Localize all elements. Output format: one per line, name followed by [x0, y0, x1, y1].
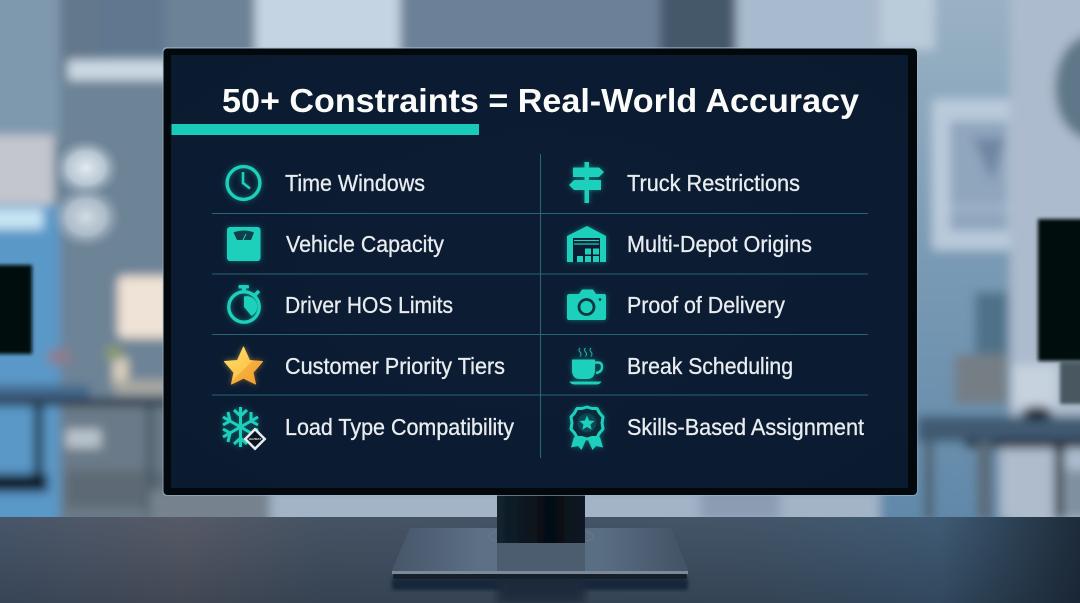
item: Customer Priority Tiers: [224, 347, 505, 384]
table surface: [0, 517, 1080, 603]
icon: camera: [567, 290, 606, 320]
label: Truck Restrictions: Truck Restrictions: [627, 170, 800, 196]
icon: warehouse: [567, 226, 606, 262]
label: Multi-Depot Origins: Multi-Depot Origins: [627, 231, 812, 257]
label: Vehicle Capacity: Vehicle Capacity: [286, 231, 444, 257]
label: Driver HOS Limits: Driver HOS Limits: [285, 292, 453, 318]
item: Break Scheduling: [570, 348, 793, 384]
title: 50+ Constraints = Real-World Accuracy: [222, 82, 860, 119]
label: Customer Priority Tiers: Customer Priority Tiers: [285, 353, 505, 379]
monitor stand: [392, 495, 688, 603]
label: Break Scheduling: Break Scheduling: [627, 353, 793, 379]
icon: coffee cup: [570, 348, 602, 384]
label: Load Type Compatibility: Load Type Compatibility: [285, 414, 514, 440]
icon: clock: [227, 167, 260, 199]
icon: signpost: [569, 162, 604, 203]
monitor screen: [171, 55, 908, 488]
item: Time Windows: [227, 167, 425, 199]
item: Driver HOS Limits: [229, 285, 453, 322]
item: Proof of Delivery: [567, 290, 785, 320]
label: Skills-Based Assignment: Skills-Based Assignment: [627, 414, 865, 440]
item: Multi-Depot Origins: [567, 226, 812, 262]
item: Skills-Based Assignment: [571, 407, 865, 450]
icon: award badge: [571, 407, 603, 450]
item: Truck Restrictions: [569, 162, 800, 203]
title accent bar: [172, 124, 479, 135]
label: Proof of Delivery: Proof of Delivery: [627, 292, 785, 318]
distant dark monitors: [0, 219, 1080, 404]
grid dividers: [212, 154, 868, 458]
wall sconce lights: [50, 138, 122, 249]
icon: gold star: [224, 347, 262, 384]
monitor bezel: [162, 47, 918, 496]
icon: stopwatch: [229, 285, 259, 322]
icon: weighing scale: [227, 227, 260, 261]
item: Load Type Compatibility: [223, 407, 514, 450]
item: Vehicle Capacity: [227, 227, 444, 261]
icon: snowflake with hazmat diamond: [223, 407, 266, 450]
label: Time Windows: Time Windows: [285, 170, 425, 196]
icon: snowflake with hazmat diamond: HAZMAT: [249, 437, 261, 441]
